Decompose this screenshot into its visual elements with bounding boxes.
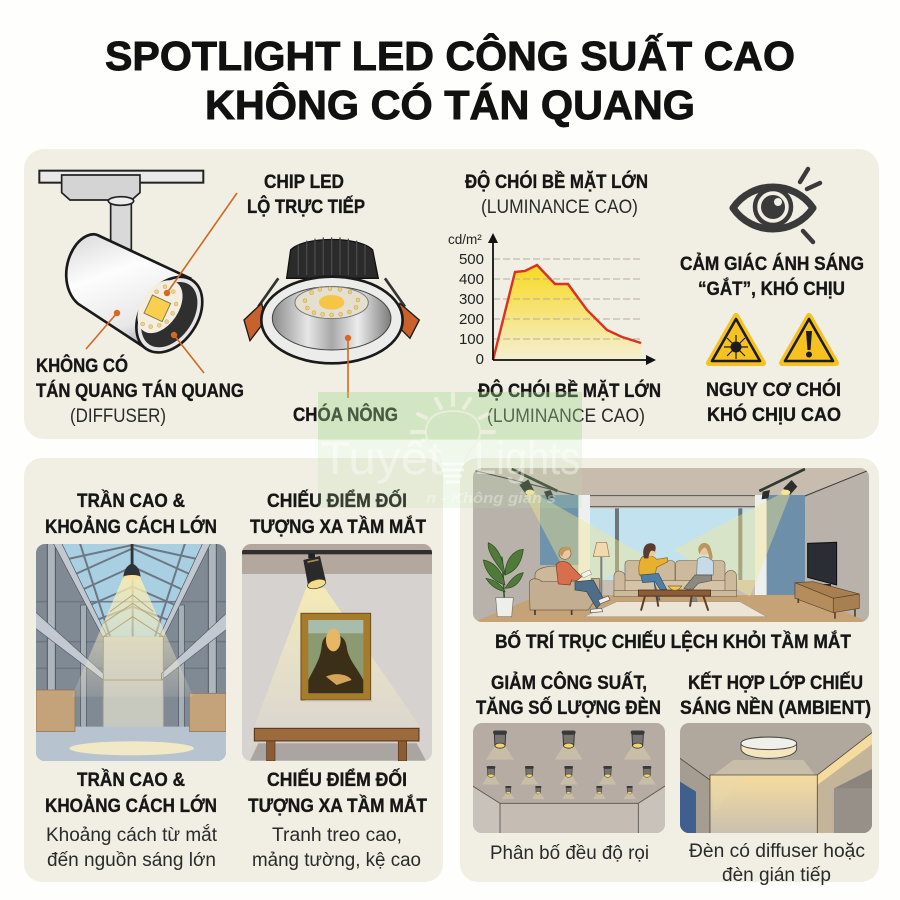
watermark: Tuyết Lights: Tuyết [320,432,442,484]
illustration: many small downlights [470,722,667,835]
icon: laser glare warning [709,316,763,363]
chart: luminance curve: 500 [459,251,484,268]
chart: luminance curve: 100 [459,331,484,348]
chart: luminance curve: 300 [459,291,484,308]
leader lines [86,193,351,398]
sofa [614,561,737,597]
illustration: gallery painting [240,543,437,763]
label: chip LED: LỘ TRỰC TIẾP [247,196,365,218]
caption: high ceiling [45,769,218,871]
icon: eye with glare [733,169,820,242]
heading: reduce power: TĂNG SỐ LƯỢNG ĐÈN [476,697,661,719]
person: man [556,547,610,613]
label: no diffuser: KHÔNG CÓ [36,355,128,377]
heading: high ceiling: TRẦN CAO & [77,490,185,512]
person: woman blue [684,543,713,602]
track lights [512,469,805,499]
caption: diffuser or indirect: Đèn có diffuser hoặc [689,841,865,862]
caption: high ceiling: KHOẢNG CÁCH LỚN [45,795,217,817]
text: harsh light sensation: CẢM GIÁC ÁNH SÁNG [680,253,864,275]
caption: diffuser or indirect: đèn gián tiếp [722,865,831,886]
heading: high ceiling: KHOẢNG CÁCH LỚN [45,516,217,538]
heading: reduce power [476,672,661,719]
label: no diffuser [36,355,244,427]
heading: distant object: CHIẾU ĐIỂM ĐỐI [267,490,407,512]
caption: distant object: mảng tường, kệ cao [252,850,421,871]
text: glare risk: KHÓ CHỊU CAO [707,404,841,426]
heading: distant object: TƯỢNG XA TẦM MẮT [250,516,426,538]
tv and console [795,542,859,619]
text: harsh light sensation [680,253,864,300]
illustration: warehouse high ceiling [33,543,230,763]
caption: high ceiling: đến nguồn sáng lớn [47,850,216,871]
caption: high ceiling: TRẦN CAO & [77,769,185,791]
label: chip LED [247,172,365,218]
lamp [593,542,609,595]
heading: distant object [250,490,426,538]
heading: reduce power: GIẢM CÔNG SUẤT, [491,672,647,694]
caption: distant object [248,769,427,871]
person: woman yellow [639,543,668,600]
label: shallow reflector: CHÓA NÔNG [293,404,398,426]
heading: surface luminance [465,171,648,218]
watermark: Tuyết Lights: n - Không gian s [426,490,556,507]
heading: ambient layer [680,672,871,719]
label: no diffuser: TÁN QUANG TÁN QUANG [36,380,244,402]
plant [483,543,523,617]
title: KHÔNG CÓ TÁN QUANG [205,82,695,128]
title [105,33,795,128]
caption: surface luminance: ĐỘ CHÓI BỀ MẶT LỚN [478,380,661,402]
text: glare risk [706,379,841,426]
caption: high ceiling: Khoảng cách từ mắt [46,824,218,846]
chart: luminance curve [448,232,656,368]
label: chip LED: CHIP LED [264,172,344,193]
chart: luminance curve: 200 [459,311,484,328]
panel: top characteristics [24,149,879,439]
coffee table [638,586,711,611]
illustration: living room with off-axis spotlights [470,467,873,627]
heading: surface luminance: ĐỘ CHÓI BỀ MẶT LỚN [465,171,648,193]
caption: distant object: CHIẾU ĐIỂM ĐỐI [267,769,407,791]
icon: recessed downlight [244,237,419,363]
chart: luminance curve: 400 [459,271,484,288]
text: glare risk: NGUY CƠ CHÓI [706,379,841,401]
panel: typical contexts [24,458,443,882]
caption: distant object: Tranh treo cao, [272,825,402,846]
heading: ambient layer: SÁNG NỀN (AMBIENT) [680,697,871,719]
caption: surface luminance: (LUMINANCE CAO) [487,406,645,427]
panel: solutions [460,458,879,882]
watermark: Tuyết Lights [318,392,582,508]
icon: track spotlight [39,171,216,365]
heading: high ceiling [45,490,217,538]
chart: luminance curve: cd/m² [448,232,482,247]
armchair [529,566,599,615]
caption: distant object: TƯỢNG XA TẦM MẮT [248,795,427,817]
illustration: ambient ceiling light and cove [678,722,875,835]
text: harsh light sensation: “GẮT”, KHÓ CHỊU [698,278,845,300]
watermark: Tuyết Lights: Lights [474,432,580,484]
caption: surface luminance [478,380,661,427]
label: no diffuser: (DIFFUSER) [70,406,166,427]
caption: even distribution: Phân bố đều độ rọi [490,843,649,864]
heading: ambient layer: KẾT HỢP LỚP CHIẾU [688,672,863,694]
caption: off-axis aiming: BỐ TRÍ TRỤC CHIẾU LỆCH KHỎI TẦM MẮT [495,631,851,653]
heading: surface luminance: (LUMINANCE CAO) [481,197,638,218]
chart: luminance curve: 0 [476,351,484,368]
caption: diffuser or indirect [689,841,865,886]
icon: exclamation warning [782,316,836,363]
title: SPOTLIGHT LED CÔNG SUẤT CAO [105,33,795,79]
